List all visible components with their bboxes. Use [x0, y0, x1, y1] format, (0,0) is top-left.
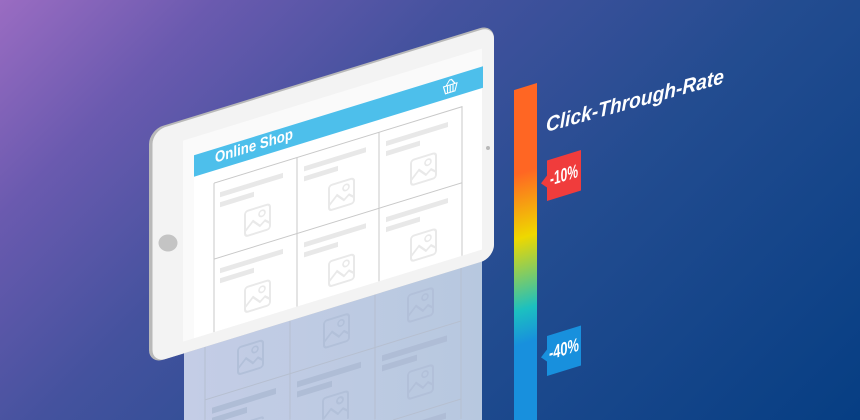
title: Click-Through-Rate: Click-Through-Rate	[546, 64, 724, 137]
tablet	[149, 24, 494, 364]
callout: -10%	[541, 150, 581, 203]
screen	[183, 48, 483, 342]
callout: -40%	[541, 326, 581, 378]
tablet body	[152, 26, 494, 363]
header banner	[194, 66, 483, 177]
banner title: Online Shop	[215, 126, 293, 167]
camera dot	[486, 146, 490, 150]
scrolled page below the tablet	[184, 252, 482, 420]
product grid	[214, 107, 462, 332]
callout: -10%: -10%	[550, 160, 578, 190]
click-through-rate gradient bar	[514, 83, 537, 420]
callout: -40%: -40%	[549, 334, 579, 365]
home button	[158, 234, 178, 252]
skewed scene	[149, 0, 581, 420]
tablet edge	[149, 24, 494, 364]
icon: basket	[444, 78, 457, 94]
